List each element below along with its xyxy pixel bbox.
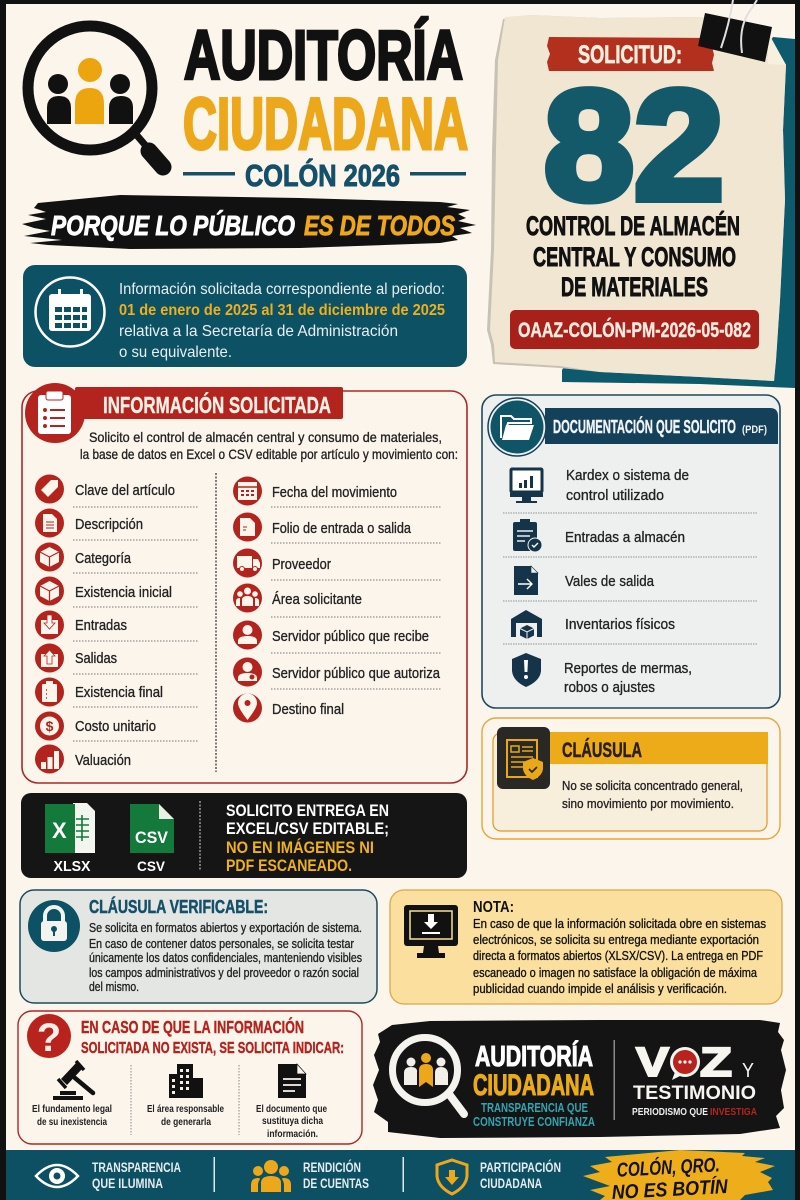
body text: únicamente los datos confidenciales, manteniendo visibles — [89, 951, 362, 965]
logo: wordmark: CONSTRUYE CONFIANZA — [473, 1115, 595, 1129]
item: fundamento legal: de su inexistencia — [37, 1117, 107, 1128]
icon: question mark — [27, 1014, 71, 1060]
body text: del mismo. — [89, 980, 139, 994]
delivery text: SOLICITO ENTREGA EN — [226, 802, 389, 820]
item: Entradas a almacén: Entradas a almacén — [565, 529, 685, 546]
body text — [89, 921, 362, 994]
binder clip — [698, 0, 772, 62]
body text: En caso de que la información solicitada obre en sistemas — [473, 916, 766, 931]
body text: Se solicita en formatos abiertos y exportación de sistema. — [89, 921, 362, 935]
clause text — [562, 778, 743, 811]
panel: periodo — [23, 265, 467, 367]
heading: CLÁUSULA VERIFICABLE: — [89, 896, 268, 917]
body text: los campos administrativos y del proveedor o razón social — [89, 966, 359, 980]
icon: certified document — [497, 727, 550, 789]
icon: excel file: XLSX — [54, 858, 90, 875]
intro text — [80, 429, 458, 462]
item: Vales de salida — [514, 566, 655, 595]
list item: Servidor público que recibe: Servidor público que recibe — [272, 628, 429, 645]
logo icon: magnifier with people — [28, 26, 163, 167]
item: Entradas a almacén — [513, 519, 685, 552]
logo: Voz y Testimonio: Y — [742, 1060, 754, 1082]
heading banner: INFORMACIÓN SOLICITADA — [103, 391, 331, 418]
list item: Salidas: Salidas — [75, 650, 117, 667]
list item: Destino final: Destino final — [272, 701, 344, 718]
footer band — [6, 1150, 795, 1200]
list item: Clave del artículo: Clave del artículo — [75, 482, 175, 499]
item: Inventarios físicos — [511, 610, 675, 639]
list item: Folio de entrada o salida — [233, 512, 412, 542]
list item: Descripción: Descripción — [75, 516, 143, 533]
body text: publicidad cuando impide el análisis y verificación. — [473, 981, 727, 996]
panel: cláusula — [482, 718, 780, 839]
item: Vales de salida: Vales de salida — [565, 573, 655, 590]
list item: Proveedor: Proveedor — [272, 556, 331, 573]
heading band: CLÁUSULA — [562, 739, 642, 762]
logo: Voz y Testimonio — [632, 1039, 757, 1118]
panel: logo brush block — [373, 1020, 786, 1138]
logo: magnifier — [392, 1038, 464, 1114]
title: COLÓN 2026 — [245, 157, 400, 193]
list item: Servidor público que autoriza — [233, 658, 441, 686]
clause text: sino movimiento por movimiento. — [562, 796, 734, 811]
logo: wordmark: TRANSPARENCIA QUE — [481, 1101, 588, 1115]
item: área responsable: El área responsable — [147, 1104, 224, 1115]
clause text: No se solicita concentrado general, — [562, 778, 743, 793]
solicitud label — [547, 37, 714, 71]
logo: Voz y Testimonio: INVESTIGA — [710, 1107, 757, 1118]
footer: transparencia — [36, 1160, 181, 1191]
list item: Existencia inicial: Existencia inicial — [75, 584, 172, 601]
icon: folder — [488, 398, 546, 456]
logo: Voz y Testimonio: TESTIMONIO — [633, 1083, 756, 1104]
text: periodo solicitado: 01 de enero de 2025 al 31 de diciembre de 2025 — [119, 302, 445, 319]
panel: formato de entrega — [21, 793, 467, 878]
footer: participación ciudadana — [437, 1160, 561, 1194]
footer: rendición de cuentas — [251, 1160, 369, 1192]
intro text: la base de datos en Excel o CSV editable por artículo y movimiento con: — [80, 446, 458, 462]
list item: Clave del artículo — [35, 474, 175, 504]
list item: Proveedor — [233, 548, 331, 578]
footer: transparencia: TRANSPARENCIA — [92, 1160, 181, 1175]
number 82: 82 — [544, 59, 724, 233]
heading: NOTA: — [473, 899, 514, 916]
footer: transparencia: QUE ILUMINA — [92, 1176, 163, 1191]
title — [183, 16, 468, 193]
list item: Área solicitante — [233, 584, 362, 612]
heading band — [545, 732, 768, 764]
heading band: (PDF) — [742, 424, 767, 436]
request title — [526, 210, 740, 302]
list item: Entradas: Entradas — [75, 617, 127, 634]
body text: electrónicos, se solicita su entrega mediante exportación — [473, 932, 759, 947]
body text — [473, 916, 766, 996]
icon: calendar — [36, 278, 104, 346]
list item: Servidor público que autoriza: Servidor público que autoriza — [272, 665, 441, 682]
panel: solicitud paper note — [487, 0, 795, 388]
item: documento sustituto: El documento que — [256, 1104, 327, 1115]
text: periodo solicitado: relativa a la Secretaría de Administración — [119, 323, 398, 340]
panel: cláusula verificable — [20, 890, 377, 1003]
footer: rendición de cuentas: RENDICIÓN — [303, 1160, 361, 1175]
item: área responsable: de generarla — [161, 1117, 211, 1128]
icon: excel file — [45, 803, 95, 875]
logo: Voz y Testimonio: PERIODISMO QUE — [632, 1107, 708, 1118]
logo: Voz y Testimonio: V — [636, 1039, 670, 1085]
text: periodo solicitado: Información solicitada correspondiente al periodo: — [119, 281, 445, 298]
logo: wordmark: CIUDADANA — [473, 1069, 594, 1102]
slogan brush banner — [22, 195, 476, 249]
item: fundamento legal — [32, 1061, 112, 1128]
item: fundamento legal: El fundamento legal — [32, 1104, 112, 1115]
body text: En caso de contener datos personales, se solicita testar — [89, 937, 354, 951]
icon: monitor download — [404, 905, 458, 958]
item: Kardex: Kardex o sistema de — [566, 467, 689, 484]
list item: Servidor público que recibe — [233, 620, 429, 650]
panel: información solicitada — [22, 383, 467, 783]
list item: Costo unitario: $ — [46, 718, 54, 734]
logo: wordmark: AUDITORÍA — [475, 1039, 593, 1073]
heading — [81, 1016, 344, 1057]
item: Kardex: control utilizado — [566, 487, 664, 504]
text: periodo solicitado: o su equivalente. — [119, 344, 232, 361]
item: documento sustituto: sustituya dicha — [262, 1116, 323, 1127]
heading: EN CASO DE QUE LA INFORMACIÓN — [81, 1016, 304, 1037]
item: documento sustituto: información. — [267, 1129, 318, 1140]
slogan brush banner: ES DE TODOS — [304, 210, 455, 241]
footer: participación ciudadana: CIUDADANA — [480, 1176, 542, 1191]
list item: Costo unitario: Costo unitario — [75, 718, 156, 735]
icon: question mark: ? — [37, 1016, 61, 1060]
list item: Valuación — [35, 744, 131, 774]
list item: Descripción — [35, 508, 143, 538]
body text: escaneado o imagen no satisface la obligación de máxima — [473, 965, 758, 980]
panel: en caso de inexistencia — [18, 1011, 362, 1144]
item: Reportes de mermas — [512, 653, 692, 696]
icon: csv file: CSV — [135, 828, 169, 847]
item: Inventarios físicos: Inventarios físicos — [565, 616, 675, 633]
text: periodo solicitado — [119, 281, 445, 361]
item: documento sustituto — [256, 1064, 327, 1140]
delivery text: NO EN IMÁGENES NI — [226, 838, 374, 857]
delivery text — [226, 802, 389, 875]
delivery text: EXCEL/CSV EDITABLE; — [226, 820, 389, 838]
panel: nota — [390, 890, 782, 1004]
footer: rendición de cuentas: DE CUENTAS — [303, 1176, 369, 1191]
footer: participación ciudadana: PARTICIPACIÓN — [480, 1160, 561, 1175]
solicitud label: SOLICITUD: — [578, 41, 682, 69]
logo: Voz y Testimonio: Z — [700, 1039, 732, 1085]
list item: Destino final — [233, 694, 344, 722]
icon: csv file: CSV — [137, 858, 166, 874]
list item: Categoría: Categoría — [75, 550, 132, 567]
intro text: Solicito el control de almacén central y consumo de materiales, — [89, 429, 442, 445]
list item: Salidas — [35, 644, 117, 672]
item: Kardex — [510, 467, 689, 504]
footer: slogan brush: COLÓN, QRO. — [616, 1152, 720, 1182]
heading banner — [75, 387, 343, 419]
folio code — [510, 310, 759, 349]
icon: clipboard — [25, 383, 85, 443]
list item: Fecha del movimiento — [233, 476, 397, 506]
item: Reportes de mermas: Reportes de mermas, — [564, 660, 692, 677]
icon: padlock — [28, 900, 80, 952]
list item: Fecha del movimiento: Fecha del movimiento — [272, 484, 397, 501]
list item: Entradas — [35, 610, 127, 640]
list item: Área solicitante: Área solicitante — [272, 591, 362, 608]
list item: Existencia inicial — [35, 576, 172, 606]
title: CIUDADANA — [183, 84, 468, 165]
item: Reportes de mermas: robos o ajustes — [564, 679, 655, 696]
title: AUDITORÍA — [184, 16, 463, 94]
icon: csv file — [130, 804, 174, 874]
panel: documentación — [482, 395, 780, 708]
list item: Existencia final: Existencia final — [75, 684, 163, 701]
logo: wordmark — [473, 1039, 595, 1129]
heading band — [545, 408, 778, 444]
list item: Valuación: Valuación — [75, 752, 131, 769]
heading: SOLICITADA NO EXISTA, SE SOLICITA INDICAR: — [81, 1040, 344, 1057]
list item: Existencia final — [35, 678, 163, 706]
list item: Categoría — [35, 542, 132, 572]
item: área responsable — [147, 1064, 224, 1128]
request title: DE MATERIALES — [561, 272, 708, 302]
icon: excel file: X — [52, 818, 67, 843]
footer: slogan brush — [583, 1150, 775, 1200]
delivery text: PDF ESCANEADO. — [226, 857, 352, 875]
list item: Folio de entrada o salida: Folio de entrada o salida — [272, 520, 412, 537]
slogan brush banner: PORQUE LO PÚBLICO — [51, 210, 295, 241]
list item: Costo unitario — [35, 712, 156, 740]
